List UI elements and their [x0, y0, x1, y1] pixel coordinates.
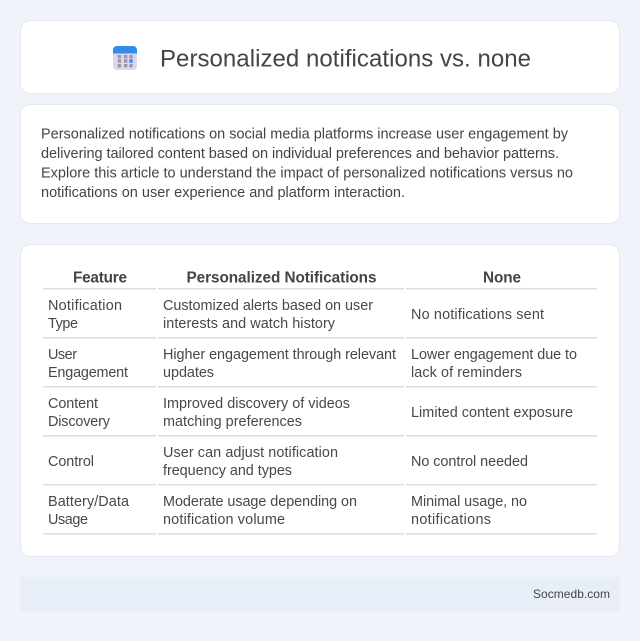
table row: user engagement: updates — [163, 365, 214, 381]
table header: Personalized Notifications — [186, 270, 376, 286]
table row: notification type: No notifications sent — [411, 307, 544, 323]
table row: content discovery: Limited content exposure — [411, 405, 573, 421]
text block: introduction: notifications on user experience and platform interaction. — [41, 185, 405, 201]
table row: content discovery: Discovery — [48, 414, 111, 430]
text block: introduction — [41, 126, 573, 201]
table header: None — [483, 270, 521, 286]
table row: content discovery: Improved discovery of videos — [163, 396, 350, 412]
table row: battery and data usage: Battery/Data — [48, 494, 129, 510]
footer bar — [20, 577, 620, 611]
table row: notification type: Type — [48, 316, 78, 332]
text block: introduction: Explore this article to understand the impact of personalized notifications versus no — [41, 166, 573, 182]
table row: control: No control needed — [411, 454, 528, 470]
table row: control — [48, 445, 528, 479]
title: Personalized notifications vs. none — [160, 46, 531, 72]
panel: title card — [20, 20, 620, 94]
table row: content discovery: matching preferences — [163, 414, 302, 430]
table row: control: Control — [48, 454, 94, 470]
table row: user engagement — [48, 347, 577, 381]
table row: notification type: Notification — [48, 298, 122, 314]
table header: Feature — [73, 270, 127, 286]
table row: battery and data usage: notification volume — [163, 512, 285, 528]
table row: user engagement: Engagement — [48, 365, 128, 381]
table row: user engagement: Higher engagement through relevant — [163, 347, 396, 363]
table row: battery and data usage — [48, 494, 527, 528]
table row: notification type — [48, 298, 544, 332]
footer text: Socmedb.com — [533, 587, 610, 601]
table row: battery and data usage: Usage — [48, 512, 88, 528]
table row: notification type: Customized alerts based on user — [163, 298, 373, 314]
table row: battery and data usage: notifications — [411, 512, 491, 528]
table row: battery and data usage: Moderate usage depending on — [163, 494, 357, 510]
table row: user engagement: lack of reminders — [411, 365, 522, 381]
panel: comparison table — [20, 244, 620, 557]
table row: content discovery: Content — [48, 396, 98, 412]
table row: battery and data usage: Minimal usage, no — [411, 494, 527, 510]
table row: content discovery — [48, 396, 573, 430]
table row: user engagement: Lower engagement due to — [411, 347, 577, 363]
table row: user engagement: User — [48, 347, 77, 363]
text block: introduction: Personalized notifications on social media platforms increase user engagement by — [41, 126, 569, 142]
table row: notification type: interests and watch history — [163, 316, 336, 332]
table row: control: frequency and types — [163, 463, 292, 479]
table row: control: User can adjust notification — [163, 445, 338, 461]
panel: introduction — [20, 104, 620, 224]
icon: calendar — [113, 46, 137, 70]
table header — [73, 270, 521, 286]
text block: introduction: delivering tailored content based on individual preferences and behavior patterns. — [41, 146, 559, 162]
